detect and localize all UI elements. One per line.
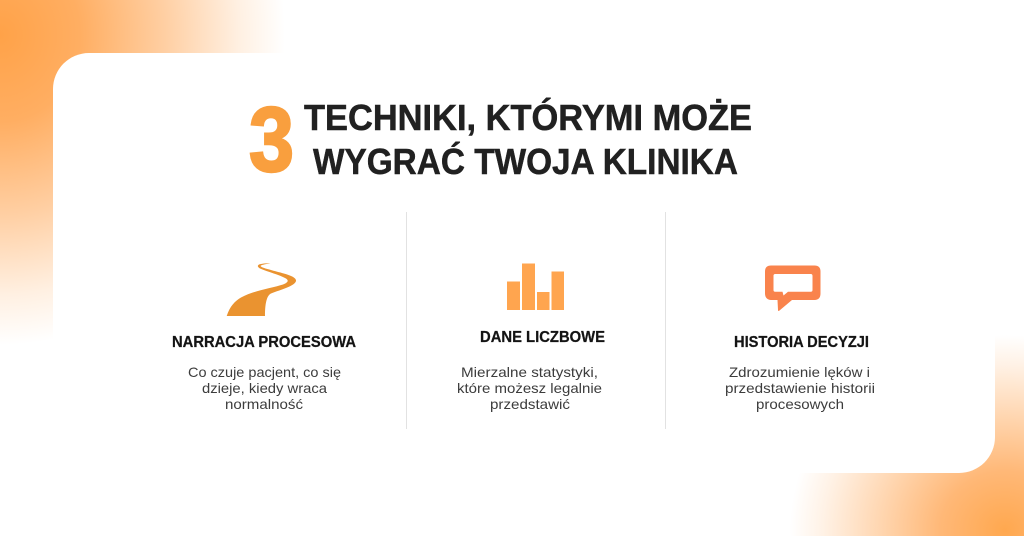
description: Mierzalne statystyki, [461,364,598,380]
icon: bar chart [507,264,564,310]
description: które możesz legalnie [457,380,602,396]
gradient: top left [0,0,300,350]
description: normalność [225,396,303,412]
title [249,89,752,191]
description [725,364,875,412]
title line 2: WYGRAĆ TWOJA KLINIKA [313,140,738,182]
icon: speech bubble [765,266,820,311]
description: procesowych [756,396,844,412]
panel: main card [53,53,995,473]
heading: DANE LICZBOWE [480,329,605,346]
description: Zdrozumienie lęków i [729,364,870,380]
heading: HISTORIA DECYZJI [734,334,869,351]
description [457,364,602,412]
icon: winding road [227,263,296,316]
description: Co czuje pacjent, co się [188,364,341,380]
title line 1: TECHNIKI, KTÓRYMI MOŻE [304,96,752,138]
description: przedstawić [490,396,570,412]
description: dzieje, kiedy wraca [202,380,327,396]
panel: dane liczbowe [457,264,605,412]
panel: narracja procesowa [172,263,356,412]
title numeral: 3 [249,89,294,191]
description: przedstawienie historii [725,380,875,396]
heading: NARRACJA PROCESOWA [172,334,356,351]
panel: historia decyzji [725,266,875,412]
description [188,364,341,412]
gradient: bottom right [780,325,1024,536]
